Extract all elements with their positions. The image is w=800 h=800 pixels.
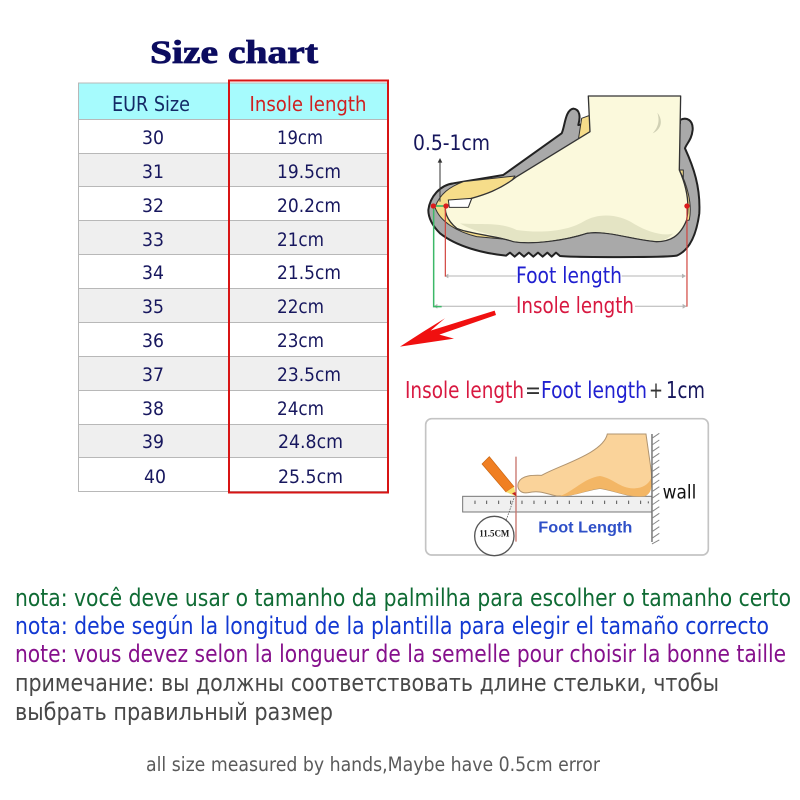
panel: how to measure foot	[426, 419, 708, 556]
table header	[78, 83, 387, 119]
foot arch shading	[560, 476, 651, 496]
table rows: 23.5cm	[277, 364, 341, 386]
table rows: 33	[142, 229, 164, 251]
arrow: red pointing to table	[400, 311, 496, 347]
table rows: 34	[142, 262, 164, 284]
table rows: 31	[142, 161, 164, 183]
table rows: 20.2cm	[277, 195, 341, 217]
ankle bone mark	[653, 113, 661, 133]
table rows: 21cm	[277, 229, 324, 251]
formula: insole length equals foot length plus 1cm: =	[525, 378, 541, 404]
multilingual notes	[15, 584, 791, 726]
table rows: 36	[142, 330, 164, 352]
formula: insole length equals foot length plus 1cm	[405, 378, 705, 404]
table rows: 40	[144, 466, 166, 488]
wall	[652, 433, 659, 544]
note: Russian	[15, 669, 719, 726]
foot sole shading	[460, 215, 673, 242]
title: Size chart	[150, 35, 318, 71]
table rows: 22cm	[277, 296, 324, 318]
label: foot length: Foot length	[516, 263, 622, 289]
label: foot length: Foot Length	[538, 520, 632, 537]
table rows: 32	[142, 195, 164, 217]
table rows: 21.5cm	[277, 262, 341, 284]
foot side view	[518, 434, 652, 496]
insole lining	[435, 115, 690, 239]
toe gap	[448, 198, 472, 207]
table rows: 35	[142, 296, 164, 318]
table rows: 38	[142, 398, 164, 420]
shoe cross-section diagram	[400, 96, 699, 347]
table rows: 24.8cm	[278, 431, 343, 453]
table rows: 23cm	[277, 330, 324, 352]
table header: Insole length	[250, 92, 366, 116]
table header: EUR Size	[112, 92, 190, 116]
label: 0.5-1cm: 0.5-1cm	[413, 131, 490, 155]
panel frame	[426, 419, 708, 555]
table rows: 30	[142, 127, 164, 149]
table rows: 37	[142, 364, 164, 386]
formula: insole length equals foot length plus 1cm: Insole length	[405, 378, 524, 404]
pencil	[482, 457, 517, 497]
formula: insole length equals foot length plus 1cm: 1cm	[666, 378, 705, 404]
note: Russian: выбрать правильный размер	[15, 698, 333, 726]
foot length marker line	[514, 457, 518, 542]
ruler	[463, 496, 652, 512]
table rows: 25.5cm	[278, 466, 343, 488]
table rows: 24cm	[277, 398, 324, 420]
red highlight box	[229, 80, 388, 492]
formula: insole length equals foot length plus 1cm: Foot length	[541, 378, 647, 404]
magnifier callout	[475, 498, 514, 556]
table rows	[78, 83, 387, 492]
table rows: 19.5cm	[277, 161, 341, 183]
formula: insole length equals foot length plus 1cm: +	[649, 378, 663, 404]
label: wall: wall	[663, 482, 696, 503]
shoe sole	[428, 109, 699, 257]
footnote: all size measured by hands,Maybe have 0.5cm error	[146, 753, 601, 776]
label: insole length: Insole length	[516, 293, 634, 319]
size table	[78, 80, 388, 492]
table rows: 39	[142, 431, 164, 453]
table rows: 19cm	[277, 127, 323, 149]
measurement lines	[434, 158, 687, 308]
magnifier callout: 11.5CM	[479, 528, 510, 538]
foot	[445, 96, 688, 243]
measurement points	[431, 203, 690, 209]
